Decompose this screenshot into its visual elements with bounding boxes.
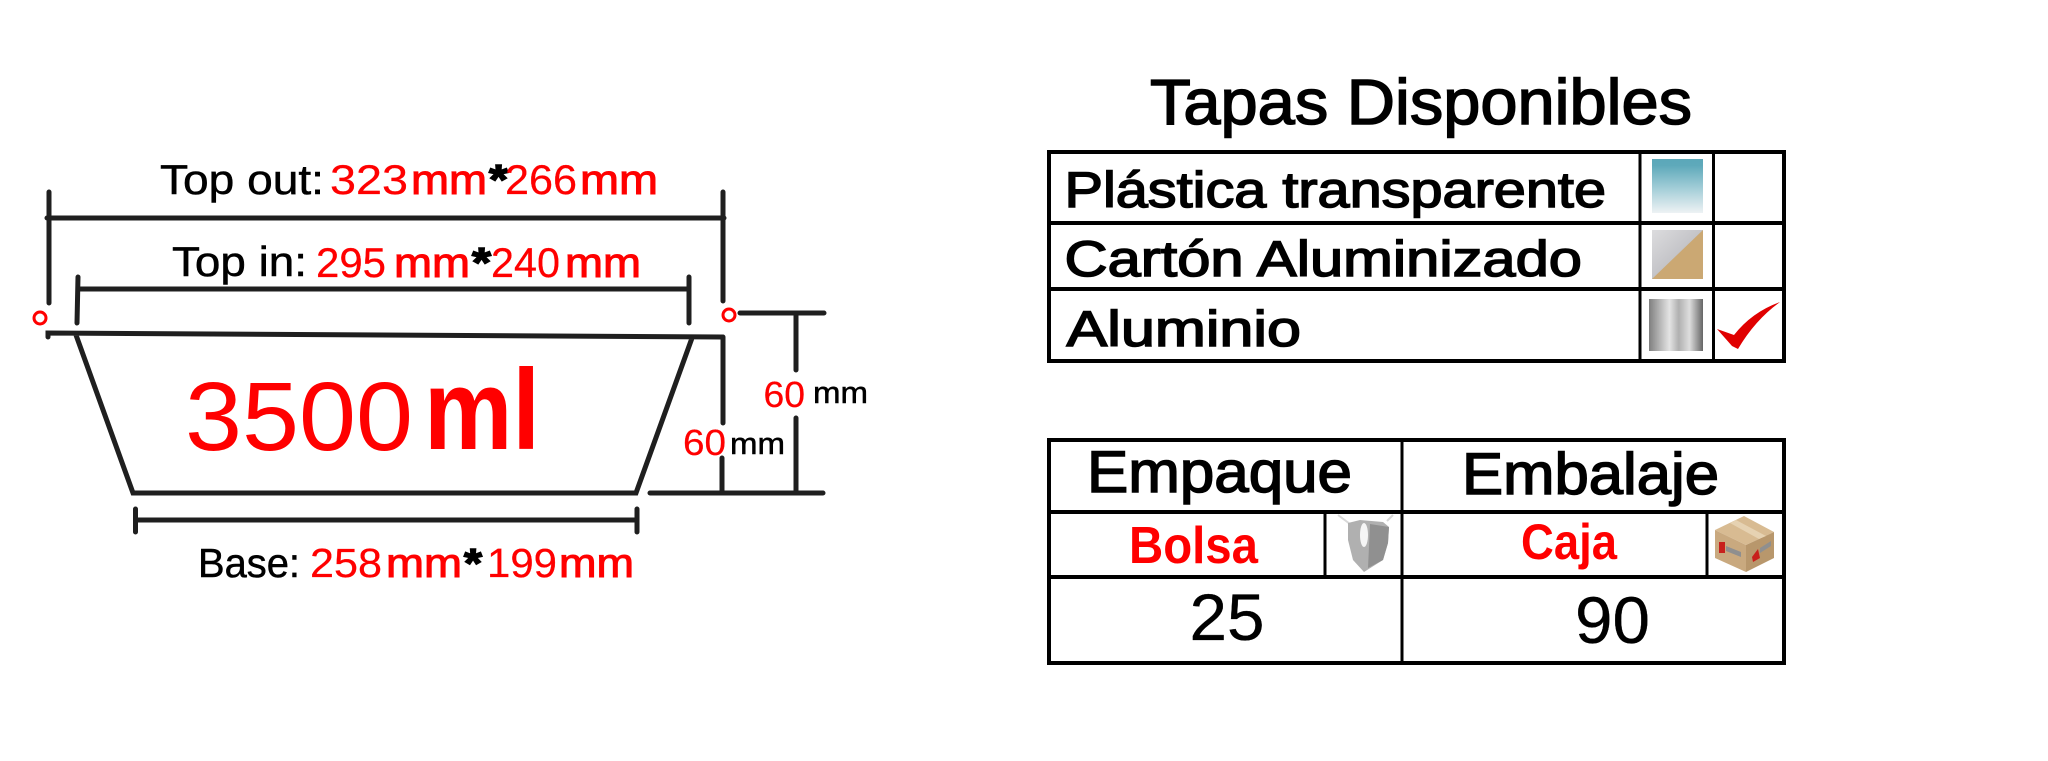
panel: lids table [1047, 150, 1786, 363]
value: pieces per bag: 25 [1190, 580, 1264, 654]
icon: cardboard box [1715, 516, 1774, 572]
heading: available lids: Tapas Disponibles [1150, 66, 1692, 138]
label: top in: 240 [491, 239, 560, 286]
label: base: * [464, 540, 482, 586]
column heading: Empaque: Empaque [1087, 440, 1352, 505]
capacity label: ml [424, 347, 540, 474]
label: inner height: mm [730, 426, 785, 461]
lids table grid [1047, 150, 1786, 363]
label: base: mm [559, 540, 634, 586]
label: base [198, 540, 634, 586]
icon: plastic bag [1338, 515, 1393, 572]
base dimension line [136, 509, 637, 532]
label: top out: 266 [505, 156, 577, 203]
column heading: Embalaje: Embalaje [1462, 442, 1719, 507]
label: inner height [683, 422, 785, 463]
label: base: 258 [310, 540, 382, 586]
label: top in: Top in: [172, 238, 307, 285]
rim marker right [723, 309, 735, 321]
top outer dimension line [47, 192, 724, 303]
row: transparent plastic [1064, 159, 1703, 218]
packaging table grid [1047, 438, 1786, 665]
label: top in: 295 [316, 239, 386, 286]
label: base: 199 [487, 540, 557, 586]
value: pieces per box: 90 [1575, 583, 1650, 657]
panel: container dimensions diagram [34, 156, 868, 586]
label: top out [160, 156, 658, 203]
row: aluminium [1066, 299, 1703, 357]
height dimension lines [650, 313, 824, 493]
label: outer height: mm [813, 375, 868, 410]
capacity label: 3500 [185, 362, 413, 471]
label: top out: 323 [330, 156, 408, 203]
label: top out: * [489, 156, 509, 203]
label: top out: mm [411, 156, 487, 203]
icon: red check mark [1717, 302, 1780, 349]
panel: packaging table [1047, 438, 1786, 665]
top inner dimension line [77, 277, 689, 323]
label: top in [172, 238, 641, 286]
row: aluminised cardboard [1064, 230, 1703, 287]
label: top in: * [472, 239, 492, 286]
label: outer height [764, 374, 868, 415]
label: top out: Top out: [160, 156, 324, 203]
row: aluminium: Aluminio [1066, 301, 1301, 357]
label: outer height: 60 [764, 374, 805, 415]
label: top in: mm [394, 239, 470, 286]
rim marker left [34, 312, 46, 324]
label: top out: mm [580, 156, 658, 203]
label: Caja: Caja [1521, 514, 1618, 570]
label: base: mm [386, 540, 462, 586]
row: aluminised cardboard: Cartón Aluminizado [1064, 231, 1582, 287]
label: Bolsa: Bolsa [1129, 517, 1259, 575]
row: transparent plastic: Plástica transparente [1064, 162, 1606, 218]
capacity label [185, 347, 540, 474]
container outline [48, 333, 722, 493]
label: inner height: 60 [683, 422, 726, 463]
label: top in: mm [565, 239, 641, 286]
label: base: Base: [198, 540, 300, 586]
